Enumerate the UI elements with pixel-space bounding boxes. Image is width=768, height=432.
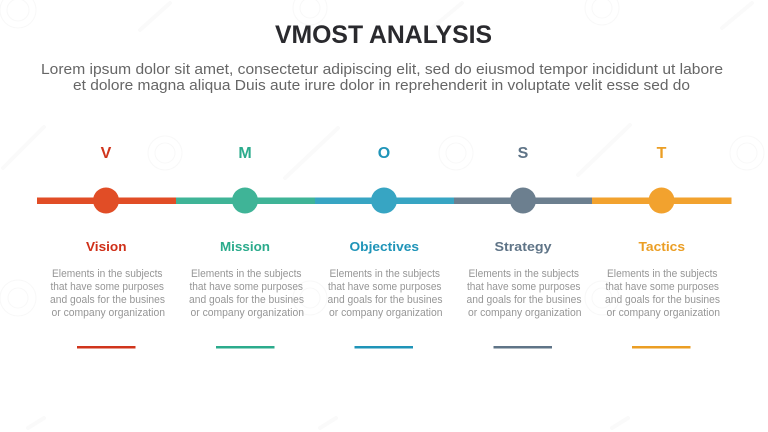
description: or company organization [329,307,442,319]
heading: Mission: Mission [220,239,270,254]
underline [354,346,413,348]
node: vision [93,188,119,214]
description: and goals for the busines [328,294,443,306]
description: and goals for the busines [466,294,582,306]
column: vision [50,145,165,348]
description: or company organization [190,307,304,319]
description: Elements in the subjects [191,268,302,280]
description [328,268,443,319]
description [466,268,582,319]
description [605,268,720,319]
heading: Vision: Vision [86,239,127,254]
subtitle text block [41,62,723,94]
node: mission [232,188,258,214]
description [189,268,304,319]
node: tactics [648,188,674,214]
heading: Strategy: Strategy [494,239,552,254]
timeline segment: tactics [592,198,732,204]
description: or company organization [52,307,165,319]
description [50,268,165,319]
description: Elements in the subjects [468,268,579,280]
column: objectives [328,145,443,348]
description: that have some purposes [467,281,581,293]
title: VMOST ANALYSIS [275,21,492,49]
timeline [37,188,732,214]
letter V: V [101,145,112,162]
column: strategy [466,145,582,348]
description: Elements in the subjects [330,268,440,280]
description: or company organization [606,307,720,319]
node: strategy [510,188,536,214]
letter T: T [657,145,667,162]
description: Elements in the subjects [52,268,163,280]
description: or company organization [468,307,582,319]
letter O: O [378,145,390,162]
timeline segment: strategy [454,198,592,204]
underline [632,346,690,348]
node: objectives [371,188,397,214]
column: mission [189,145,304,348]
subtitle text block: Lorem ipsum dolor sit amet, consectetur adipiscing elit, sed do eiusmod tempor incididunt ut labore [41,62,723,78]
description: and goals for the busines [50,294,165,306]
subtitle text block: et dolore magna aliqua Duis aute irure dolor in reprehenderit in voluptate velit esse sed do [73,78,690,94]
underline [494,346,552,348]
description: Elements in the subjects [607,268,718,280]
timeline segment: vision [37,198,176,204]
column: tactics [605,145,720,348]
timeline segment: objectives [315,198,454,204]
description: and goals for the busines [189,294,304,306]
description: that have some purposes [328,281,442,293]
description: and goals for the busines [605,294,720,306]
underline [77,346,136,348]
letter S: S [518,145,529,162]
heading: Tactics: Tactics [638,239,685,254]
letter M: M [238,145,252,162]
description: that have some purposes [606,281,719,293]
heading: Objectives: Objectives [350,239,419,254]
description: that have some purposes [50,281,164,293]
description: that have some purposes [190,281,303,293]
underline [216,346,274,348]
timeline segment: mission [176,198,315,204]
